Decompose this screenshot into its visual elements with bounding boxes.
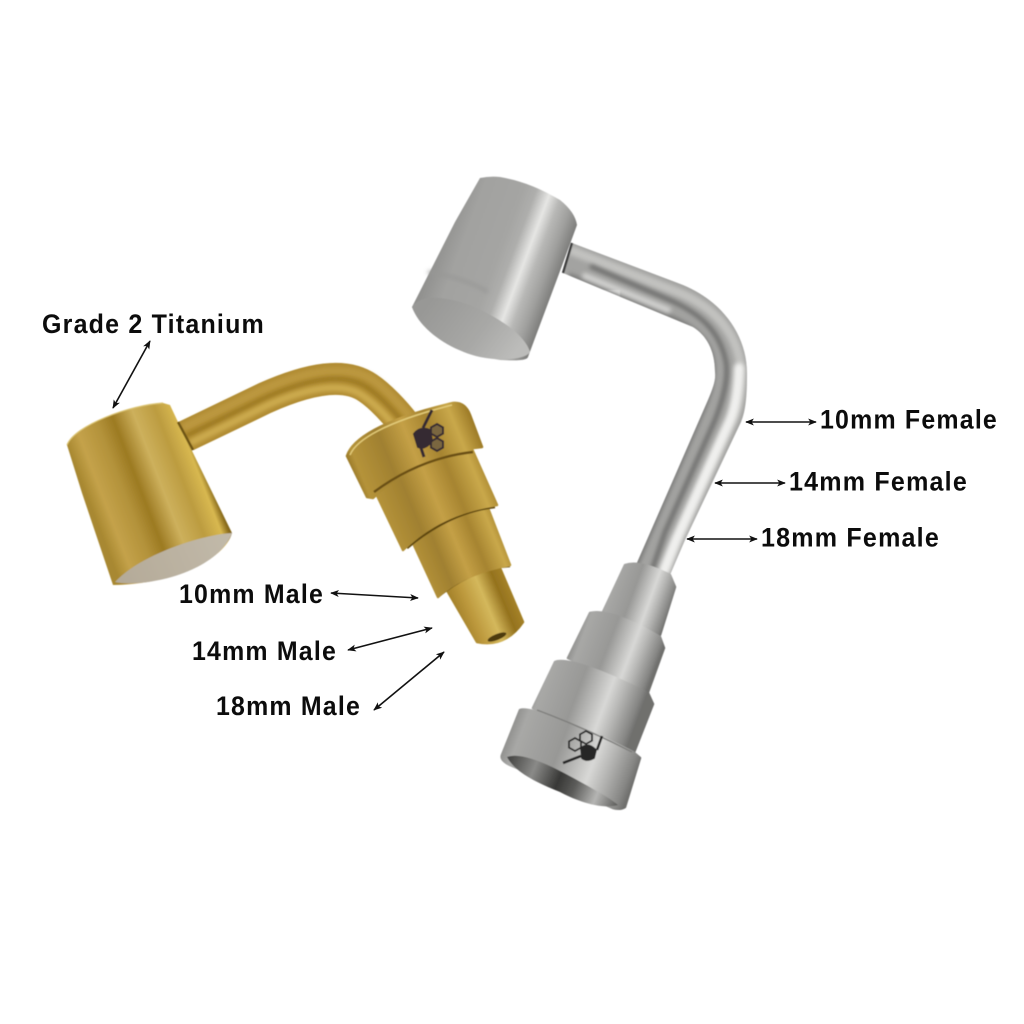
- gold step 1, top ring: [347, 403, 482, 498]
- label: 14mm Male: [192, 628, 432, 666]
- silver step 4 opening: [507, 756, 618, 806]
- gold bucket: [67, 403, 232, 585]
- label: 10mm Male: [179, 579, 418, 609]
- silver step 2: [568, 612, 664, 695]
- icon: gold ring logo: [414, 410, 443, 457]
- gold step 4, smallest: [435, 540, 523, 644]
- gold step 2: [372, 440, 497, 550]
- gold titanium nail: [67, 371, 523, 644]
- arrow: 18mm female: [687, 538, 757, 540]
- label: 10mm Male: 10mm Male: [179, 579, 324, 609]
- label: 18mm Female: 18mm Female: [761, 522, 940, 552]
- arrow: titanium to bucket: [113, 341, 150, 408]
- gold step 3: [400, 480, 510, 597]
- silver step 3: [533, 661, 653, 755]
- label: 14mm Female: 14mm Female: [789, 466, 968, 496]
- label: 18mm Male: 18mm Male: [216, 691, 361, 721]
- silver step 4, open end: [502, 710, 640, 809]
- arrow: 14mm male: [348, 628, 432, 650]
- label: Grade 2 Titanium: [42, 309, 265, 408]
- label: 10mm Female: 10mm Female: [820, 404, 998, 434]
- silver titanium nail: [412, 177, 770, 809]
- arrow: 10mm female: [746, 421, 816, 423]
- silver bucket: [412, 177, 577, 360]
- arrow: 18mm male: [374, 652, 444, 710]
- arrow: 10mm male: [331, 593, 418, 598]
- label: Grade 2 Titanium: Grade 2 Titanium: [42, 309, 265, 339]
- arrow: 14mm female: [715, 482, 785, 484]
- silver bucket end face: [412, 298, 530, 359]
- silver step 1, narrow: [603, 564, 675, 635]
- infographic canvas: [43, 176, 996, 811]
- silver bent tube: [564, 243, 748, 574]
- gold bent tube: [183, 371, 411, 443]
- label: 18mm Male: [216, 652, 444, 721]
- icon: silver ring logo: [563, 731, 602, 763]
- label: 14mm Male: 14mm Male: [192, 636, 337, 666]
- gold bucket end face: [115, 533, 232, 583]
